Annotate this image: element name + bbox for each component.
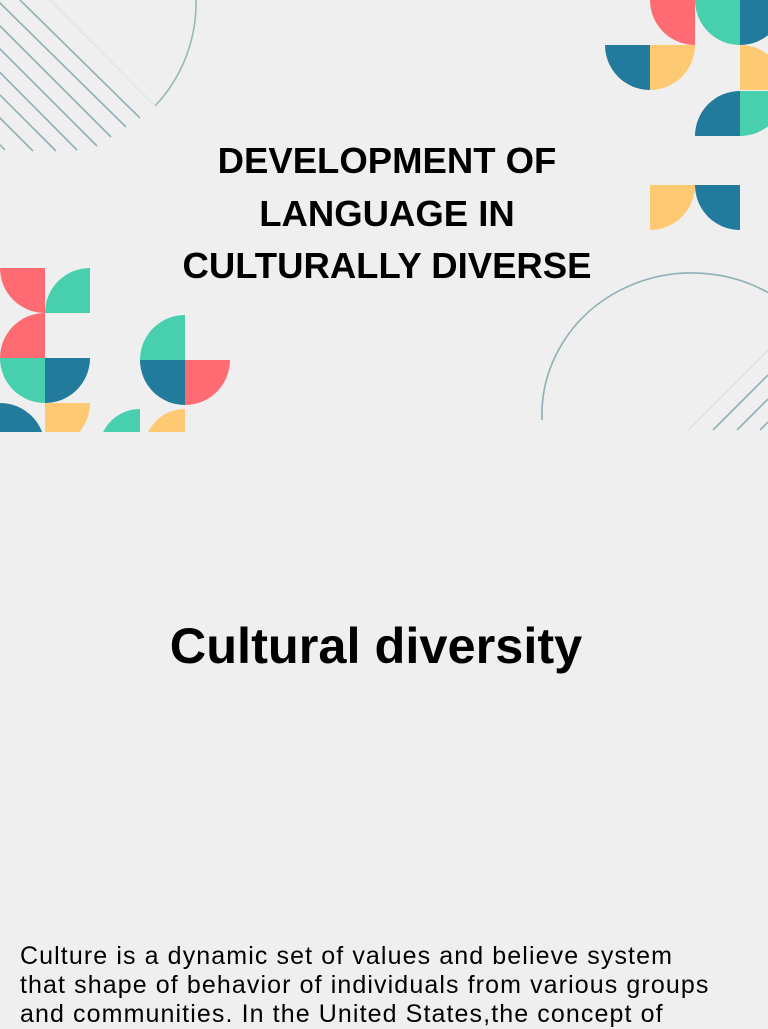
heading: cultural diversity: Cultural diversity: [170, 617, 582, 674]
title: LANGUAGE IN: [259, 192, 515, 234]
decoration: right arc and lines: [542, 273, 768, 430]
body text: Culture is a dynamic set of values and believe system: [20, 942, 673, 970]
body text: and communities. In the United States,the concept of: [20, 1000, 664, 1028]
title: CULTURALLY DIVERSE: [182, 245, 592, 286]
decoration: left quarter circles: [0, 223, 230, 493]
decoration: top-right quarter circles: [605, 0, 768, 230]
title: DEVELOPMENT OF: [218, 140, 556, 181]
decoration: top-left line pattern: [0, 0, 196, 151]
body text: [20, 942, 709, 1028]
body text: that shape of behavior of individuals from various groups: [20, 971, 709, 999]
title: [182, 140, 592, 286]
